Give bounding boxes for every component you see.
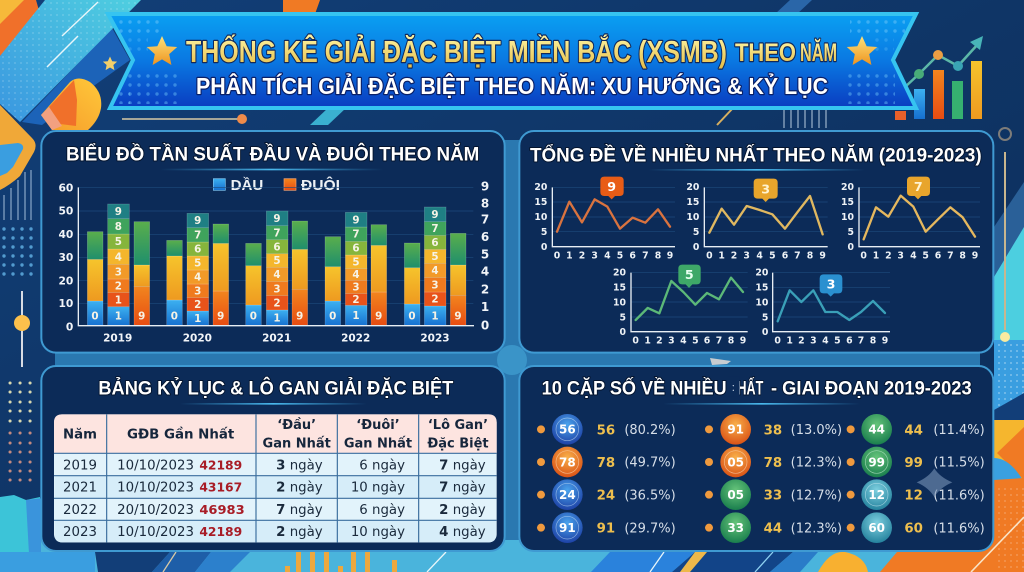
left axis labels: 30 [58, 251, 73, 264]
left axis labels [58, 181, 73, 333]
left axis labels: 40 [58, 228, 73, 241]
right axis labels: 9 [481, 180, 489, 194]
banner [108, 14, 916, 108]
line chart: second year: 1 [718, 251, 725, 262]
bars: 2019: 4 [115, 251, 122, 263]
line chart: fourth year: 3 [668, 336, 675, 347]
row 2023: 4 ngày [439, 524, 486, 540]
bars: 2019: 8 [115, 221, 122, 233]
bars: 2020 [167, 213, 229, 326]
row 2019: 42189 [199, 458, 242, 472]
list: second column: 33 [764, 489, 782, 504]
line chart: fifth year: 7 [858, 336, 864, 347]
list: second column: 78 [764, 456, 782, 471]
bars: 2019 [87, 204, 150, 326]
bars: 2021: 5 [273, 255, 281, 267]
bars: 2020: 0 [171, 310, 178, 322]
list: first column: (80.2%) [624, 423, 676, 438]
line chart: first year: 0 [541, 242, 548, 253]
line chart: first year [534, 177, 675, 262]
line chart: fourth year: 9 [740, 336, 746, 347]
bars: 2022: 3 [352, 282, 360, 294]
row 2022: 6 ngày [359, 502, 405, 518]
list: third column: (11.5%) [933, 456, 985, 471]
bars: 2023: 3 [431, 279, 439, 291]
list: first column: 24 [597, 489, 615, 504]
list: third column: 44 [868, 423, 885, 437]
heading: bar chart: BIỂU ĐỒ TẦN SUẤT ĐẦU VÀ ĐUÔI THEO NĂM [66, 142, 479, 166]
panel: frequency bar chart [41, 131, 505, 353]
list: second column: 05 [727, 488, 744, 502]
panel: records table [41, 366, 505, 551]
bars: 2022: 2 [352, 294, 360, 306]
line chart: second year: 0 [706, 251, 713, 262]
line chart: first year: 10 [534, 212, 548, 223]
bars: 2021 [246, 211, 308, 326]
title: NĂM [800, 38, 837, 67]
line chart: third year: 10 [841, 212, 855, 223]
line chart: first year: 9 [607, 179, 616, 194]
row 2021: 7 ngày [439, 480, 486, 496]
line chart: fifth year: 15 [755, 283, 768, 294]
line chart: fourth year: 10 [613, 297, 627, 308]
line chart: fifth year: 10 [755, 297, 769, 308]
bars: 2019: 3 [115, 266, 122, 278]
table header: ‘Đuôi’ [356, 418, 400, 433]
table header: ‘Đầu’ [277, 418, 316, 433]
line chart: third year: 20 [841, 182, 855, 193]
list: first column: (49.7%) [624, 456, 676, 471]
line chart: third year: 3 [897, 251, 904, 262]
list: second column: (12.3%) [791, 456, 842, 471]
list: third column: 44 [904, 423, 923, 438]
row 2023: 2 ngày [276, 524, 323, 540]
list: second column: (13.0%) [791, 423, 842, 438]
line chart: third year: 6 [935, 251, 941, 262]
left axis labels: 10 [58, 297, 73, 310]
row 2023: 10 ngày [351, 524, 405, 540]
list: third column: 12 [904, 489, 923, 504]
list: third column: (11.6%) [933, 488, 985, 503]
bars: 2023: 4 [431, 265, 439, 277]
bars: 2021: 1 [273, 312, 281, 324]
row 2021: 43167 [199, 481, 242, 495]
list: third column: 99 [904, 456, 923, 471]
list: first column: 56 [559, 423, 576, 437]
icon: growth bar chart [895, 36, 983, 120]
list: third column: 12 [868, 488, 885, 502]
bars: 2019: 5 [115, 236, 122, 248]
list: second column: (12.7%) [791, 488, 842, 503]
heading: top number pairs [542, 377, 972, 399]
row 2019: 2019 [63, 458, 97, 473]
list: third column: (11.6%) [933, 521, 985, 536]
list: third column: 60 [904, 522, 923, 537]
bars: 2020: 5 [194, 258, 201, 270]
line chart: first year: 5 [617, 251, 623, 262]
row 2023: 2023 [63, 525, 97, 540]
line chart: fourth year: 20 [613, 268, 627, 279]
bars: 2019: 1 [115, 294, 122, 306]
right axis labels: 8 [481, 197, 489, 211]
heading: line charts: TỔNG ĐỀ VỀ NHIỀU NHẤT THEO NĂM (2019-2023) [530, 143, 982, 167]
line chart: fifth year: 0 [774, 336, 781, 347]
line chart: second year: 6 [782, 251, 788, 262]
bars: 2022: 9 [352, 214, 360, 226]
line chart: fourth year: 8 [728, 336, 734, 347]
line chart: fifth year: 5 [762, 312, 768, 323]
table header [63, 418, 489, 451]
line chart: fifth year: 9 [882, 336, 888, 347]
row 2023: 10/10/2023 [117, 525, 194, 540]
bars: 2022: 9 [375, 310, 382, 322]
left axis labels: 60 [58, 181, 73, 194]
bars: 2020: 1 [194, 313, 201, 325]
bars: 2021: 9 [296, 310, 303, 322]
bars: 2021: 9 [273, 213, 281, 225]
line chart: third year: 7 [947, 251, 954, 262]
line chart: fourth year: 5 [692, 336, 699, 347]
bars: 2019: 1 [115, 311, 122, 323]
line chart: third year: 0 [860, 251, 867, 262]
line chart: first year: 7 [642, 251, 649, 262]
bars: 2020: 3 [194, 285, 201, 297]
bars: 2020: 2 [194, 299, 201, 311]
left axis labels: 20 [58, 274, 73, 287]
line chart: second year: 8 [807, 251, 813, 262]
bars: 2023: 7 [431, 223, 439, 235]
list: second column: 44 [764, 522, 782, 537]
bars: 2019: 9 [138, 310, 145, 322]
table header: Gan Nhất [344, 436, 412, 451]
decorative fragment [710, 358, 731, 365]
list: third column: 60 [868, 521, 885, 535]
row 2022: 2022 [63, 503, 97, 518]
bars: 2022: 7 [352, 229, 360, 241]
line chart: first year: 8 [655, 251, 661, 262]
year labels: 2020 [183, 332, 212, 344]
bars: 2021: 3 [273, 283, 281, 295]
row 2021: 2 ngày [276, 480, 323, 496]
line chart: fourth year: 0 [619, 327, 626, 338]
bars: 2020: 6 [194, 244, 201, 256]
row 2019: 3 ngày [276, 457, 323, 473]
list: third column [847, 414, 985, 543]
row 2023: 42189 [199, 525, 242, 539]
year labels: 2023 [420, 332, 450, 344]
heading: records table: BẢNG KỶ LỤC & LÔ GAN GIẢI ĐẶC BIỆT [98, 375, 453, 399]
right axis labels: 2 [481, 282, 489, 296]
icon: left star [147, 36, 177, 65]
line chart: first year: 5 [541, 227, 547, 238]
line chart: fourth year: 1 [644, 336, 651, 347]
bars: 2022: 6 [352, 243, 360, 255]
row 2021: 10/10/2023 [117, 481, 194, 496]
line chart: fourth year: 5 [619, 312, 626, 323]
right axis labels: 6 [481, 230, 489, 244]
row 2021: 2021 [63, 481, 97, 496]
line chart: first year: 9 [667, 251, 673, 262]
bars: 2019: 2 [115, 280, 122, 292]
row 2019 [63, 457, 486, 473]
small gold star [103, 56, 117, 70]
line chart: second year: 9 [819, 251, 826, 262]
bars: 2019: 0 [91, 310, 99, 322]
line chart: fifth year: 3 [827, 276, 835, 291]
line chart: first year: 20 [534, 182, 548, 193]
line chart: fifth year: 8 [870, 336, 876, 347]
left axis labels: 50 [58, 205, 73, 218]
line chart: fourth year [613, 265, 748, 347]
bars: 2022: 4 [352, 269, 360, 281]
row 2021: 10 ngày [351, 480, 405, 496]
row 2023 [63, 524, 486, 540]
table header: GĐB Gần Nhất [127, 427, 234, 442]
right axis labels [481, 180, 489, 332]
bars: 2022 [325, 212, 387, 326]
line chart: third year: 15 [841, 197, 854, 208]
panel: top number pairs [519, 366, 993, 551]
line chart: fifth year: 2 [798, 336, 805, 347]
line chart: fifth year [755, 268, 890, 347]
subtitle: PHÂN TÍCH GIẢI ĐẶC BIỆT THEO NĂM: XU HƯỚNG & KỶ LỤC [196, 71, 828, 99]
list: second column [705, 414, 842, 543]
line chart: third year: 5 [847, 227, 854, 238]
right axis labels: 0 [481, 318, 489, 332]
line chart: fifth year: 0 [762, 327, 769, 338]
row 2022: 7 ngày [276, 502, 323, 518]
line chart: first year: 1 [566, 251, 573, 262]
bars: 2022: 0 [329, 310, 336, 322]
row 2021 [63, 480, 486, 496]
line chart: third year: 4 [910, 251, 917, 262]
line chart: fourth year: 0 [632, 336, 639, 347]
list: third column: (11.4%) [933, 423, 985, 438]
bars: 2021: 4 [273, 269, 281, 281]
list: second column: 91 [727, 423, 744, 437]
bars: 2023: 5 [431, 251, 439, 263]
bars: 2023: 0 [408, 310, 416, 322]
year labels: 2022 [341, 332, 370, 344]
title: THEO [735, 39, 796, 67]
table header: Đặc Biệt [427, 436, 489, 451]
legend: ĐUÔI [301, 176, 340, 194]
line chart: fourth year: 7 [716, 336, 722, 347]
line chart: third year: 8 [959, 251, 966, 262]
list: first column: 78 [559, 455, 576, 469]
list: first column: 56 [597, 423, 615, 438]
line chart: third year: 1 [873, 251, 879, 262]
bars: 2021: 2 [273, 297, 281, 309]
line chart: second year: 3 [743, 251, 750, 262]
line chart: second year: 10 [686, 212, 700, 223]
list: first column: 91 [597, 522, 615, 537]
line chart: third year: 7 [914, 179, 923, 194]
row 2019: 7 ngày [439, 457, 486, 473]
bars: 2021: 0 [250, 310, 257, 322]
bars: 2020: 9 [217, 310, 224, 322]
line chart: first year: 2 [579, 251, 585, 262]
heading: top number pairs: - GIAI ĐOẠN 2019-2023 [771, 378, 972, 399]
right axis labels: 5 [481, 247, 489, 261]
row 2022: 46983 [199, 503, 245, 517]
line chart: second year: 15 [686, 197, 699, 208]
legend: DẦU [231, 177, 263, 194]
icon: right star [847, 36, 877, 65]
sparkle [917, 468, 952, 497]
line chart: second year: 7 [794, 251, 801, 262]
line chart: fifth year: 6 [846, 336, 853, 347]
legend [213, 176, 340, 194]
list: first column: (36.5%) [624, 488, 676, 503]
line chart: fifth year: 1 [786, 336, 793, 347]
list: second column: 05 [727, 455, 744, 469]
row 2019: 6 ngày [359, 457, 405, 473]
bars: 2023: 2 [431, 294, 439, 306]
line chart: first year: 4 [604, 251, 611, 262]
row 2022 [63, 502, 486, 518]
line chart: fourth year: 15 [613, 283, 626, 294]
table header: ‘Lô Gan’ [428, 418, 488, 433]
line chart: fifth year: 3 [810, 336, 817, 347]
right axis labels: 1 [481, 300, 489, 314]
line chart: second year: 0 [693, 242, 700, 253]
line chart: second year: 2 [731, 251, 737, 262]
line chart: third year: 5 [922, 251, 929, 262]
bars: 2022: 5 [352, 256, 360, 268]
line chart: first year: 3 [591, 251, 598, 262]
table header: Năm [63, 427, 97, 442]
title: THỐNG KÊ GIẢI ĐẶC BIỆT MIỀN BẮC (XSMB) [186, 33, 727, 69]
table header: Gan Nhất [263, 436, 331, 451]
bars: 2022: 1 [352, 310, 360, 322]
line chart: second year: 4 [756, 251, 763, 262]
list: first column: 78 [597, 456, 615, 471]
line chart: first year: 0 [554, 251, 561, 262]
bars: 2021: 6 [273, 241, 281, 253]
line chart: fourth year: 5 [685, 267, 694, 282]
line chart: third year: 0 [847, 242, 854, 253]
line chart: first year: 6 [629, 251, 636, 262]
line chart: fourth year: 4 [680, 336, 687, 347]
list: first column: 91 [559, 521, 576, 535]
row 2022: 2 ngày [439, 502, 486, 518]
line chart: second year: 3 [761, 181, 770, 196]
line chart: second year [686, 179, 828, 262]
line chart: fifth year: 4 [822, 336, 829, 347]
year labels [103, 332, 450, 344]
left axis labels: 0 [66, 320, 73, 333]
line chart: second year: 5 [769, 251, 776, 262]
right axis labels: 7 [481, 213, 489, 227]
heading: top number pairs: 10 CẶP SỐ VỀ NHIỀU [542, 377, 727, 399]
line chart: first year: 15 [534, 197, 547, 208]
line chart: third year: 2 [885, 251, 892, 262]
line chart: second year: 5 [693, 227, 699, 238]
bars: 2023: 9 [431, 209, 439, 221]
row 2019: 10/10/2023 [117, 458, 194, 473]
bars: 2023: 1 [431, 310, 439, 322]
year labels: 2021 [262, 332, 291, 344]
bars: 2020: 4 [194, 272, 201, 284]
table [54, 414, 497, 542]
list: first column [537, 414, 676, 543]
bars: 2023: 6 [431, 237, 439, 249]
bars: 2021: 7 [273, 227, 281, 239]
right axis labels: 4 [481, 265, 489, 279]
list: second column: 33 [727, 521, 744, 535]
bars: 2020: 7 [194, 229, 201, 241]
list: first column: 24 [559, 488, 576, 502]
list: second column: 38 [764, 423, 782, 438]
list: second column: (12.3%) [791, 521, 842, 536]
line chart: third year [841, 177, 980, 262]
bars: 2019: 9 [115, 206, 122, 218]
row 2022: 20/10/2023 [117, 503, 194, 518]
line chart: fifth year: 20 [755, 268, 769, 279]
line chart: fourth year: 2 [656, 336, 663, 347]
list: first column: (29.7%) [624, 521, 676, 536]
year labels: 2019 [103, 332, 132, 344]
line chart: third year: 9 [972, 251, 978, 262]
bars: 2023 [404, 207, 466, 326]
line chart: fifth year: 5 [834, 336, 841, 347]
heading: top number pairs: NHẤT [728, 377, 764, 399]
line chart: second year: 20 [686, 182, 700, 193]
bars: 2023: 9 [454, 310, 462, 322]
line chart: fourth year: 6 [704, 336, 710, 347]
list: third column: 99 [868, 455, 885, 469]
panel: line charts [519, 131, 993, 353]
bars: 2020: 9 [194, 215, 201, 227]
